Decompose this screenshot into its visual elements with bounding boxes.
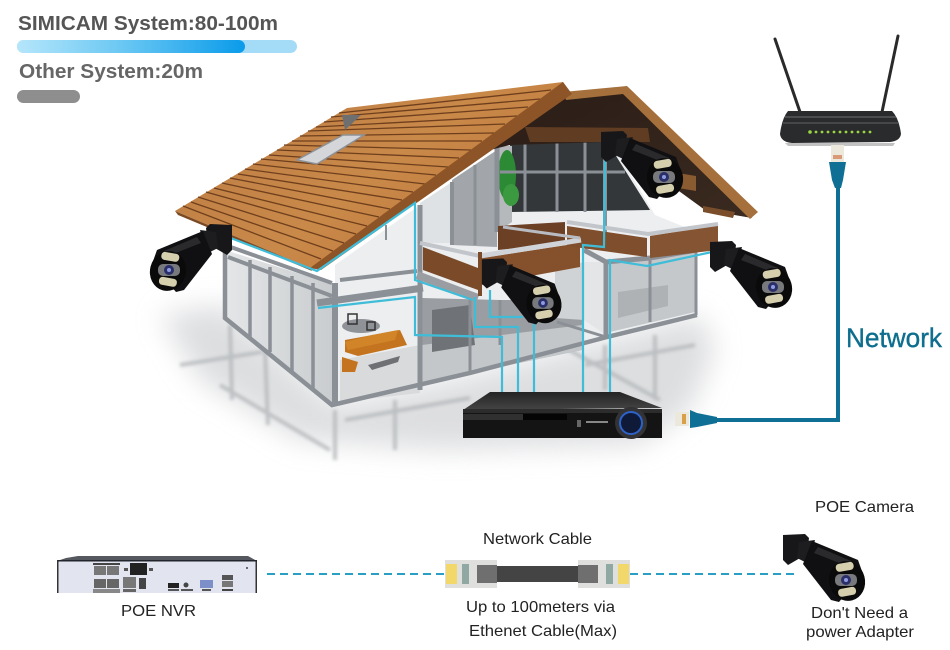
network cable to router and NVR: [675, 145, 846, 428]
heading: other system range: Other System:20m: [19, 61, 203, 83]
floor shadow and reflection: [160, 305, 715, 460]
teal cabling: [228, 158, 712, 392]
camera: center balcony: [482, 258, 566, 327]
back roof: [490, 86, 758, 219]
label: no adapter line 2: power Adapter: [806, 624, 915, 641]
router status lights: [808, 130, 871, 134]
range bar: SIMICAM 80-100m: [17, 40, 297, 53]
house illustration: [160, 82, 758, 460]
label: POE NVR: POE NVR: [121, 603, 196, 620]
dashed link: cable to camera: [630, 573, 795, 575]
glass walls: [225, 140, 697, 405]
label: POE Camera: POE Camera: [815, 499, 914, 516]
recorder: front NVR: [463, 392, 662, 439]
lower right-of-corner rooms: [340, 345, 420, 402]
balconies: [420, 222, 718, 296]
camera: upper right: [601, 131, 688, 202]
label: cable length: Up to 100meters via: [466, 599, 615, 616]
range bar: other 20m: [17, 90, 80, 103]
label: Network: Network: [846, 323, 942, 353]
label: Network Cable: Network Cable: [483, 531, 592, 548]
right connector: [578, 560, 630, 588]
heading: other system range: [17, 61, 203, 103]
front roof: [175, 82, 572, 271]
roof fascia: [310, 82, 572, 270]
network cable graphic: [445, 560, 630, 588]
camera: POE camera: [783, 534, 870, 605]
camera: right side: [710, 241, 797, 312]
heading: SIMICAM range: SIMICAM System:80-100m: [18, 13, 278, 35]
right plug: [675, 410, 717, 428]
skylight: [297, 135, 364, 164]
window frames: [225, 142, 697, 405]
rear ports: [93, 563, 248, 593]
heading: SIMICAM range: [17, 13, 297, 53]
green plant: [498, 150, 516, 200]
label: no adapter line 1: Don't Need a: [811, 605, 908, 622]
rear NVR: [57, 556, 257, 593]
router antennas: [775, 36, 898, 112]
router: [775, 36, 901, 146]
roof vent: [342, 115, 361, 130]
top plug: [829, 145, 846, 188]
sofa and table: [342, 314, 407, 372]
dashed link: NVR to cable: [267, 573, 445, 575]
camera: left eave: [145, 224, 232, 295]
label: cable type: Ethenet Cable(Max): [469, 623, 617, 640]
left connector: [445, 560, 497, 588]
dark upper windows: [510, 140, 650, 212]
